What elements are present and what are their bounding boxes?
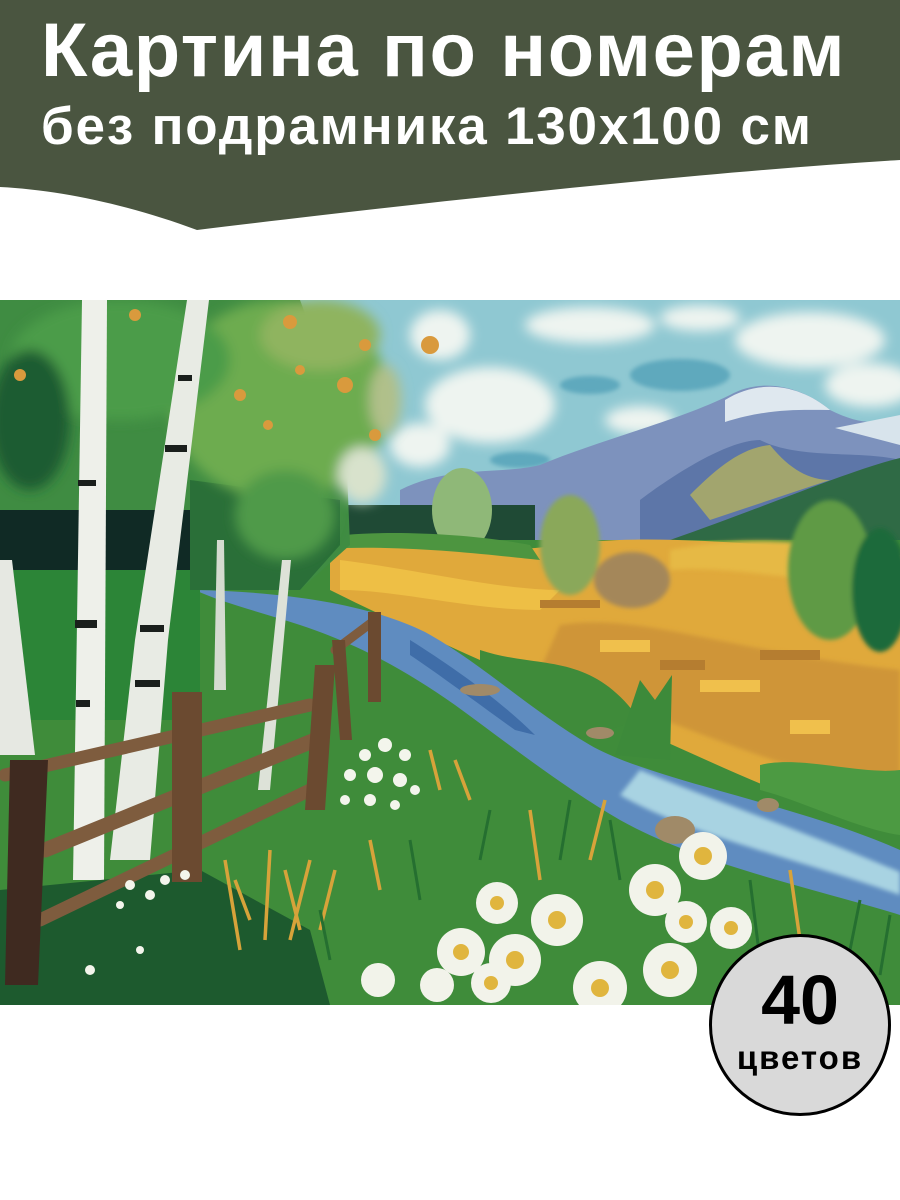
left dark forest: [0, 300, 350, 720]
daisies: [361, 832, 752, 1015]
distant treeline: [345, 468, 535, 552]
river island grass: [615, 675, 672, 760]
grass strokes: [320, 800, 890, 975]
river: [195, 590, 900, 915]
foliage: [0, 300, 401, 560]
painting: landscape: [0, 300, 900, 1005]
header banner: [0, 0, 900, 230]
golden field: [330, 533, 900, 835]
white flower cluster: [85, 738, 420, 975]
base meadow: [0, 540, 900, 1005]
sky: [0, 300, 900, 600]
yellow grass: [225, 750, 800, 950]
birch trunks: [0, 300, 291, 880]
autumn leaves: [14, 309, 439, 441]
bottom-left dark meadow: [0, 870, 330, 1005]
meadow trees: [540, 495, 900, 652]
mountains: [400, 386, 900, 570]
wooden fence: [5, 612, 381, 985]
badge number: 40: [761, 961, 839, 1039]
badge: 40 colours: [709, 934, 891, 1116]
badge label: цветов: [737, 1039, 863, 1076]
subtitle: без подрамника 130х100 см: [41, 97, 813, 156]
title: Картина по номерам: [41, 8, 846, 93]
